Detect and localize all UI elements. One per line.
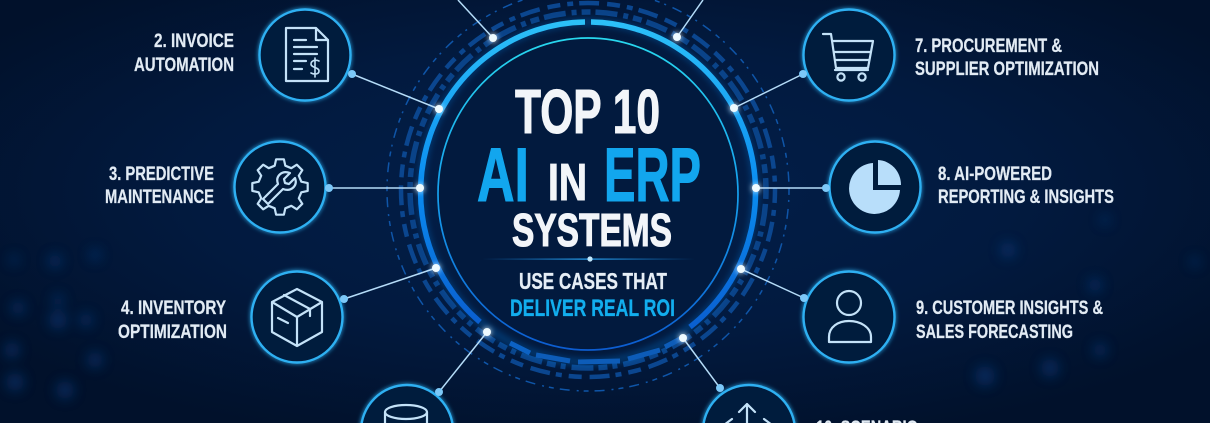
node 7: procurement <box>799 10 1099 100</box>
title: ERP: ERP <box>604 133 701 218</box>
label: OPTIMIZATION <box>118 322 227 343</box>
central hub disc <box>438 37 738 349</box>
icon: arrows <box>724 404 772 423</box>
title: systems: SYSTEMS <box>512 204 672 256</box>
outer tech rings <box>387 0 789 391</box>
icon: cart <box>823 34 873 81</box>
label: 4. INVENTORY <box>121 298 226 319</box>
label: MAINTENANCE <box>105 187 214 208</box>
icon: person <box>829 291 871 342</box>
icon: database <box>385 405 427 423</box>
background glow particles <box>4 215 1200 399</box>
label: SUPPLIER OPTIMIZATION <box>915 59 1099 80</box>
title: AI: AI <box>477 133 529 218</box>
label: 2. INVOICE <box>154 31 234 52</box>
label <box>915 36 1099 80</box>
node 5: bottom left <box>361 385 453 423</box>
label <box>118 298 227 343</box>
label <box>916 298 1103 343</box>
icon: pie chart <box>849 160 901 214</box>
title: top 10: TOP 10 <box>515 78 660 147</box>
label <box>938 164 1114 208</box>
node 4: inventory optimization <box>118 272 348 362</box>
divider <box>482 256 695 262</box>
icon: box <box>272 289 322 346</box>
node 2: invoice automation <box>134 10 356 100</box>
ring node dots <box>416 33 760 342</box>
subtitle: deliver real ROI: DELIVER REAL ROI <box>510 295 675 322</box>
connector lines <box>329 0 826 392</box>
label <box>134 31 234 76</box>
node 10: scenario <box>703 384 918 423</box>
label: 7. PROCUREMENT & <box>915 36 1062 57</box>
node 8: reporting <box>822 142 1114 232</box>
subtitle: use cases that: USE CASES THAT <box>519 268 667 294</box>
label: SALES FORECASTING <box>916 322 1073 343</box>
title block <box>477 78 701 322</box>
node 9: customer insights <box>800 272 1103 362</box>
label: 9. CUSTOMER INSIGHTS & <box>916 298 1103 319</box>
label: 8. AI-POWERED <box>938 164 1052 185</box>
title: in: IN <box>548 154 587 212</box>
label: 3. PREDICTIVE <box>109 164 214 185</box>
main ring <box>421 22 756 362</box>
label: REPORTING & INSIGHTS <box>938 187 1114 208</box>
label <box>105 164 214 208</box>
node 3: predictive maintenance <box>105 142 333 232</box>
icon: invoice <box>286 28 328 81</box>
label: AUTOMATION <box>134 55 234 76</box>
icon: gear and wrench <box>252 159 308 215</box>
